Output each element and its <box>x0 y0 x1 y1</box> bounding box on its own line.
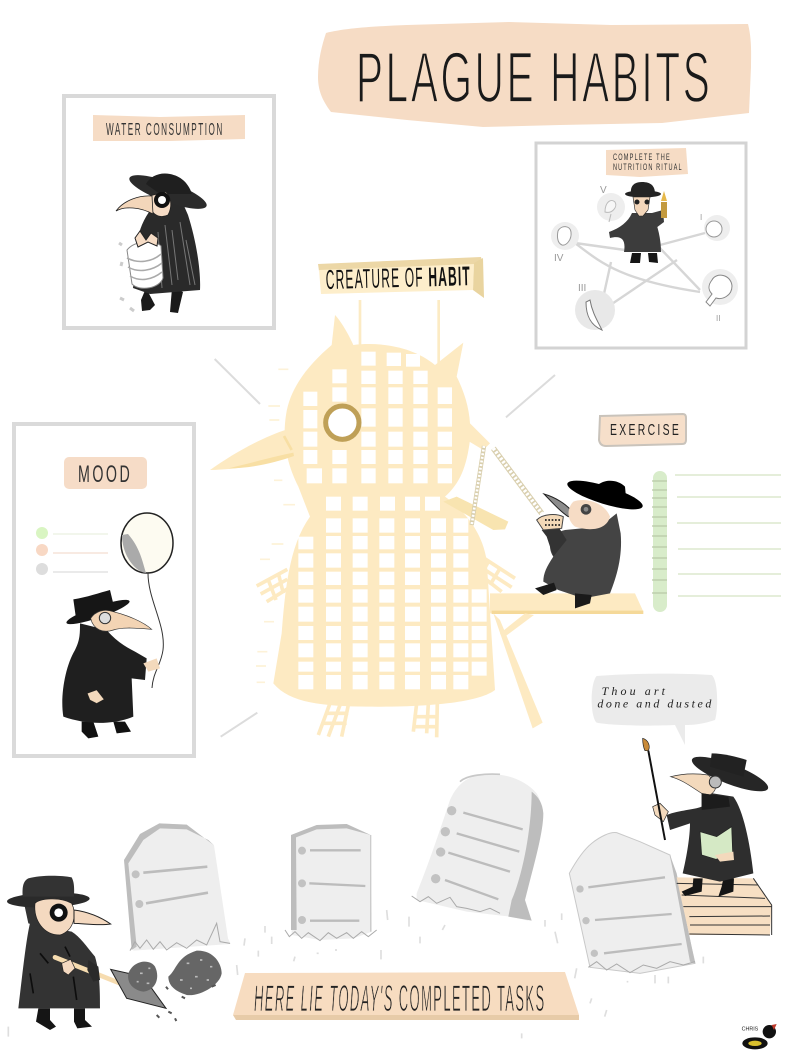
ticks <box>256 369 295 682</box>
progress bar <box>652 471 667 612</box>
bottom graveyard right <box>409 674 777 1049</box>
speech bubble: done and dusted <box>597 696 712 710</box>
roman numerals: III <box>578 283 586 294</box>
balloon <box>121 513 173 688</box>
sign: creature of habit: CREATURE OF HABIT <box>325 262 470 295</box>
label: exercise: EXERCISE <box>610 421 679 439</box>
figure: doctor with candle <box>609 182 667 263</box>
speech bubble <box>592 674 717 745</box>
panel: mood <box>14 424 194 756</box>
label: water consumption: WATER CONSUMPTION <box>106 120 222 139</box>
figure: doctor pulling rope <box>535 475 645 608</box>
label: nutrition ritual: NUTRITION RITUAL <box>613 162 682 172</box>
bird silhouette <box>210 315 643 737</box>
title <box>318 22 751 127</box>
panel: nutrition ritual <box>536 143 746 348</box>
bird habit tracker <box>210 300 645 737</box>
panel: water consumption <box>64 96 274 328</box>
head cells <box>303 352 452 511</box>
bird eye <box>326 406 359 439</box>
roman numerals: V <box>600 185 607 196</box>
swing <box>443 446 542 530</box>
dirt piles <box>128 951 222 1021</box>
title: PLAGUE HABITS <box>356 38 710 118</box>
label: mood: MOOD <box>78 461 130 488</box>
sign posts <box>360 300 439 363</box>
ground ticks <box>8 910 388 1037</box>
tombstone 1 <box>124 823 231 951</box>
label: mood <box>64 457 147 489</box>
panel: exercise <box>599 414 781 612</box>
label: nutrition ritual: COMPLETE THE <box>613 152 670 162</box>
spokes <box>215 359 555 737</box>
tombstone 4 <box>569 833 695 973</box>
wings and feet lattice <box>257 557 515 737</box>
lines <box>675 475 781 596</box>
figure: doctor digging <box>7 876 166 1030</box>
logo <box>742 1024 777 1049</box>
roman numerals: I <box>700 213 702 222</box>
figure: plague doctor with bucket <box>116 169 210 313</box>
tombstone 3 <box>412 774 543 921</box>
roman numerals <box>554 185 720 323</box>
roman numerals: II <box>716 314 720 323</box>
legend <box>36 527 108 575</box>
label: exercise <box>599 414 686 446</box>
logo: CHRIS <box>742 1027 759 1033</box>
label: water consumption <box>93 115 245 141</box>
food circles <box>551 193 738 330</box>
body cells <box>298 518 487 689</box>
figure: doctor with balloon <box>62 590 160 738</box>
label: nutrition ritual <box>606 148 688 177</box>
bottom graveyard left <box>7 823 388 1037</box>
figure: doctor with book <box>643 738 772 897</box>
ground ticks <box>409 913 703 1038</box>
speech bubble: Thou art <box>602 684 666 698</box>
banner: completed tasks: HERE LIE TODAY'S COMPLETED TASKS <box>254 978 544 1019</box>
pentagram <box>575 233 705 312</box>
crate <box>677 877 772 935</box>
tombstone 2 <box>285 824 377 941</box>
roman numerals: IV <box>554 253 564 264</box>
